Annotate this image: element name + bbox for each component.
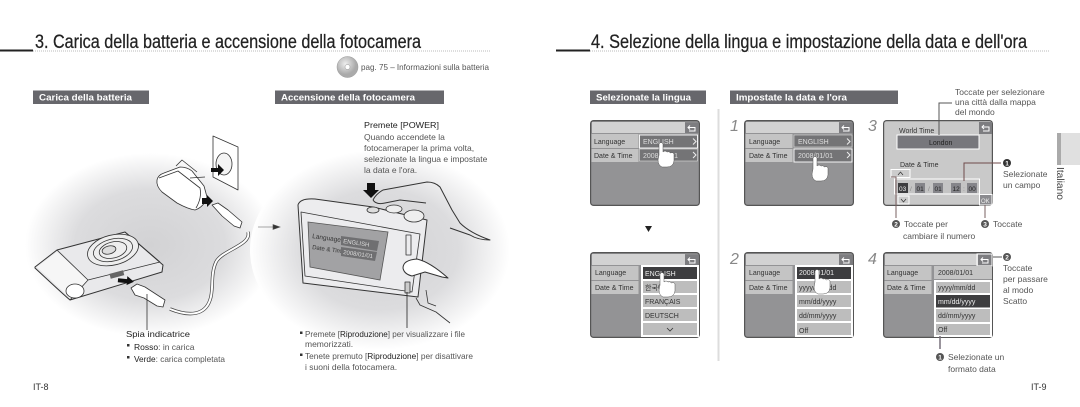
screen: language list [591, 253, 699, 337]
illustration: camera back with hand [298, 182, 490, 328]
annotation 1: select a field: 1 [1005, 160, 1009, 168]
annotation 2: shooting mode: Scatto [1003, 296, 1027, 306]
screen: language list: ENGLISH [645, 271, 676, 278]
text: playback bullets [300, 329, 473, 372]
text: Premete POWER [364, 120, 488, 175]
screen: date step 3 world time: 00 [968, 186, 976, 193]
annotation 1: select date format: formato data [948, 364, 996, 374]
illustration: camera front [35, 229, 163, 300]
illustration: camera back with hand: Date & Time [312, 245, 346, 256]
text: Premete POWER: selezionate la lingua e impostate [364, 154, 488, 164]
annotation 1: select date format [936, 336, 1005, 374]
screen: date step 3 world time: / [928, 186, 930, 193]
annotation 2: shooting mode: Toccate [1003, 263, 1033, 273]
text: Premete POWER: fotocameraper la prima volta, [364, 143, 474, 153]
screen: language step top: Date & Time [594, 153, 633, 160]
text: Premete POWER: Premete [POWER] [364, 120, 439, 130]
screen: date step 3 world time: 03 [899, 186, 907, 193]
arrow: to camera back [258, 224, 280, 230]
step number 1: 1 [730, 118, 739, 135]
annotation 2: change number: 2 [894, 222, 898, 228]
annotation 1: select a field: Selezionate [1003, 169, 1048, 179]
text: Spia indicatrice: Verde: carica completata [134, 354, 225, 364]
icon: disc reference [337, 56, 358, 78]
screen: date step 3 world time: OK [981, 199, 990, 205]
annotation 1: select a field [964, 159, 1048, 190]
side tab: Italiano: Italiano [1054, 167, 1065, 200]
screen: language step top: Language [594, 139, 625, 146]
screen: date step 1: Language [749, 139, 780, 146]
screen: date step 2: Off [799, 328, 808, 335]
page reference text: pag. 75 – Informazioni sulla batteria [361, 62, 489, 72]
screen: date step 3 world time: 01 [934, 186, 942, 193]
screen: language list: FRANÇAIS [645, 299, 681, 306]
text: Spia indicatrice: Rosso: in carica [134, 342, 195, 352]
text: Spia indicatrice [126, 329, 225, 364]
text: Premete POWER: Quando accendete la [364, 132, 445, 142]
screen: language list: Language [595, 270, 626, 277]
page number: IT-9: IT-9 [1031, 382, 1047, 392]
illustration: charger adapter [157, 160, 213, 210]
screen: date step 2: mm/dd/yyyy [799, 299, 837, 306]
screen: date step 1 [745, 121, 853, 205]
screen: date step 1: ENGLISH [798, 139, 829, 146]
section bar: Impostate la data e l'ora: Impostate la data e l'ora [736, 92, 848, 104]
annotation 2: change number: cambiare il numero [903, 231, 976, 241]
section bar: Selezionate la lingua [590, 90, 706, 104]
arrow: next language step [645, 226, 652, 232]
annotation: select a city: una città dalla mappa [955, 97, 1036, 107]
annotation: select a city: del mondo [955, 107, 995, 117]
screen: language list: 한국어 [645, 283, 664, 292]
screen: date step 1: Date & Time [749, 153, 788, 160]
screen: language step top: 2008/01/01 [643, 153, 678, 160]
illustration: camera back with hand: 2008/01/01 [343, 250, 374, 260]
screen: date step 3 world time [884, 121, 992, 205]
screen: date step 2: Language [749, 270, 780, 277]
divider between columns [718, 109, 720, 361]
callout: indicator light [146, 294, 148, 330]
screen: date step 3 world time: : [963, 186, 965, 193]
annotation 2: shooting mode: per passare [1003, 274, 1048, 284]
annotation 2: shooting mode: 2 [1005, 254, 1009, 262]
annotation: select a city: Toccate per selezionare [955, 87, 1045, 97]
screen: date step 3 world time: World Time [899, 128, 934, 135]
screen: date step 4 format list: Language [887, 270, 918, 277]
heading: section 3: 3. Carica della batteria e accensione della fotocamera [35, 32, 421, 53]
section bar: Carica della batteria [33, 90, 149, 104]
background gradient: left [25, 153, 275, 337]
screen: date step 4 format list: Date & Time [887, 285, 926, 292]
screen: language list: Date & Time [595, 285, 634, 292]
annotation 1: select date format: Selezionate un [948, 352, 1005, 362]
screen: date step 3 world time: / [910, 186, 912, 193]
screen: language step top: ENGLISH [643, 139, 674, 146]
annotation 2: change number [891, 177, 976, 241]
screen: date step 2 [745, 253, 853, 337]
screen: date step 2: dd/mm/yyyy [799, 313, 837, 320]
page number: IT-8: IT-8 [33, 382, 49, 392]
screen: date step 4 format list: yyyy/mm/dd [938, 285, 975, 292]
illustration: USB cable [131, 203, 248, 314]
screen: date step 3 world time: London [929, 140, 952, 147]
annotation 2: shooting mode [993, 253, 1048, 306]
illustration: camera back with hand: ENGLISH [343, 239, 370, 249]
screen: date step 3 world time: 12 [952, 186, 960, 193]
annotation 2: shooting mode: al modo [1003, 285, 1034, 295]
arrow: press power [363, 183, 379, 198]
section bar: Carica della batteria: Carica della batteria [39, 92, 133, 104]
screen: date step 4 format list: Off [938, 327, 947, 334]
text: playback bullets: memorizzati. [305, 339, 353, 349]
step number 4: 4 [868, 251, 877, 268]
section bar: Accensione della fotocamera: Accensione della fotocamera [281, 92, 416, 104]
annotation 3: touch OK: Toccate [993, 219, 1023, 229]
screen: date step 1: 2008/01/01 [798, 153, 833, 160]
annotation 2: change number: Toccate per [904, 219, 948, 229]
text: playback bullets: Tenete premuto [Riproduzione] per disattivare [305, 351, 473, 361]
illustration: camera back with hand: Language [312, 233, 342, 244]
text: Spia indicatrice: Spia indicatrice [126, 329, 190, 339]
screen: date step 3 world time: 01 [916, 186, 924, 193]
screen: date step 3 world time: Date & Time [900, 162, 939, 169]
screen: date step 4 format list: mm/dd/yyyy [938, 299, 976, 306]
side tab: Italiano [1054, 133, 1080, 200]
screen: date step 4 format list: 2008/01/01 [938, 270, 973, 277]
illustration: wall socket [211, 136, 238, 190]
screen: date step 4 format list [884, 253, 992, 337]
section bar: Accensione della fotocamera [275, 90, 444, 104]
annotation 3: touch OK: 3 [983, 222, 987, 228]
step number 2: 2 [729, 251, 739, 268]
background gradient: right [250, 150, 510, 350]
screen: date step 2: 2008/01/01 [799, 270, 834, 277]
annotation 1: select date format: 1 [938, 354, 942, 362]
annotation 1: select a field: un campo [1003, 180, 1041, 190]
screen: date step 2: yyyy/mm/dd [799, 285, 836, 292]
text: playback bullets: i suoni della fotocamera. [305, 362, 397, 372]
screen: language list: DEUTSCH [645, 313, 679, 320]
annotation: select a city [939, 87, 1045, 135]
screen: language step top [591, 121, 699, 205]
screen: date step 2: Date & Time [749, 285, 788, 292]
screen: date step 4 format list: dd/mm/yyyy [938, 313, 976, 320]
annotation 3: touch OK [981, 205, 1023, 229]
text: Premete POWER: la data e l'ora. [364, 165, 417, 175]
text: playback bullets: Premete [Riproduzione] per visualizzare i file [305, 329, 465, 339]
step number 3: 3 [868, 118, 877, 135]
section bar: Impostate la data e l'ora [730, 90, 898, 104]
section bar: Selezionate la lingua: Selezionate la lingua [596, 92, 692, 104]
